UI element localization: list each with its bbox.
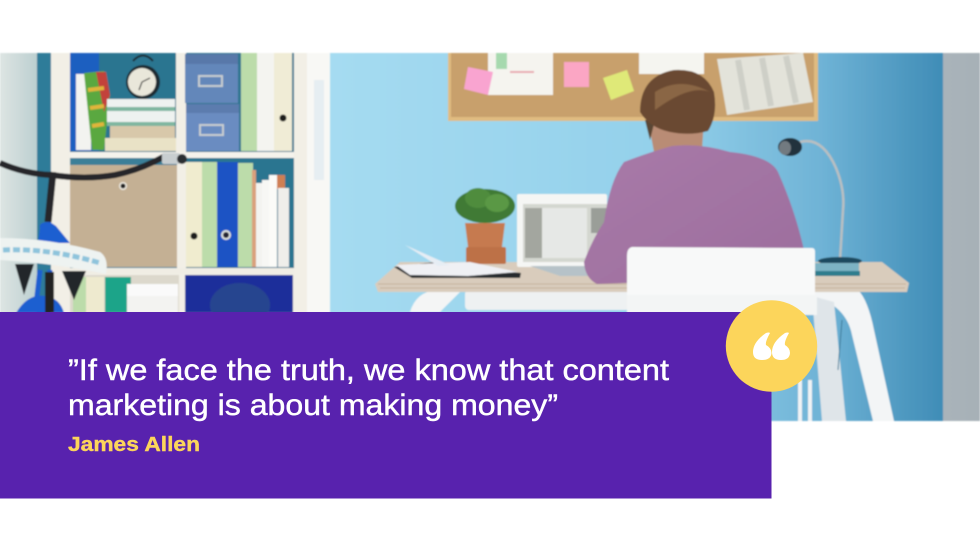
icon: quotation badge [726,300,817,392]
shelf items: books and clock [70,53,176,151]
corkboard [448,53,818,121]
bicycle [0,153,187,313]
bookcase [51,53,330,327]
grey wall [943,53,980,421]
attribution: James Allen: James Allen [68,434,200,456]
photo: office scene [0,53,980,421]
quote panel [0,312,772,498]
plant [455,188,515,264]
lamp [778,138,862,276]
blue wall [328,53,944,421]
notebook [394,245,521,278]
desk top [375,262,909,292]
laptop [517,194,628,276]
quote text [68,354,670,422]
quote text: ”If we face the truth, we know that content [68,354,670,387]
left wall [0,53,37,421]
storage boxes and binders [185,53,292,151]
fabric box and lower binders [70,162,289,313]
teal wall section [37,53,53,421]
desk legs [410,290,894,421]
man at desk [584,70,804,284]
quote text: marketing is about making money” [68,389,558,422]
chair [627,247,817,315]
